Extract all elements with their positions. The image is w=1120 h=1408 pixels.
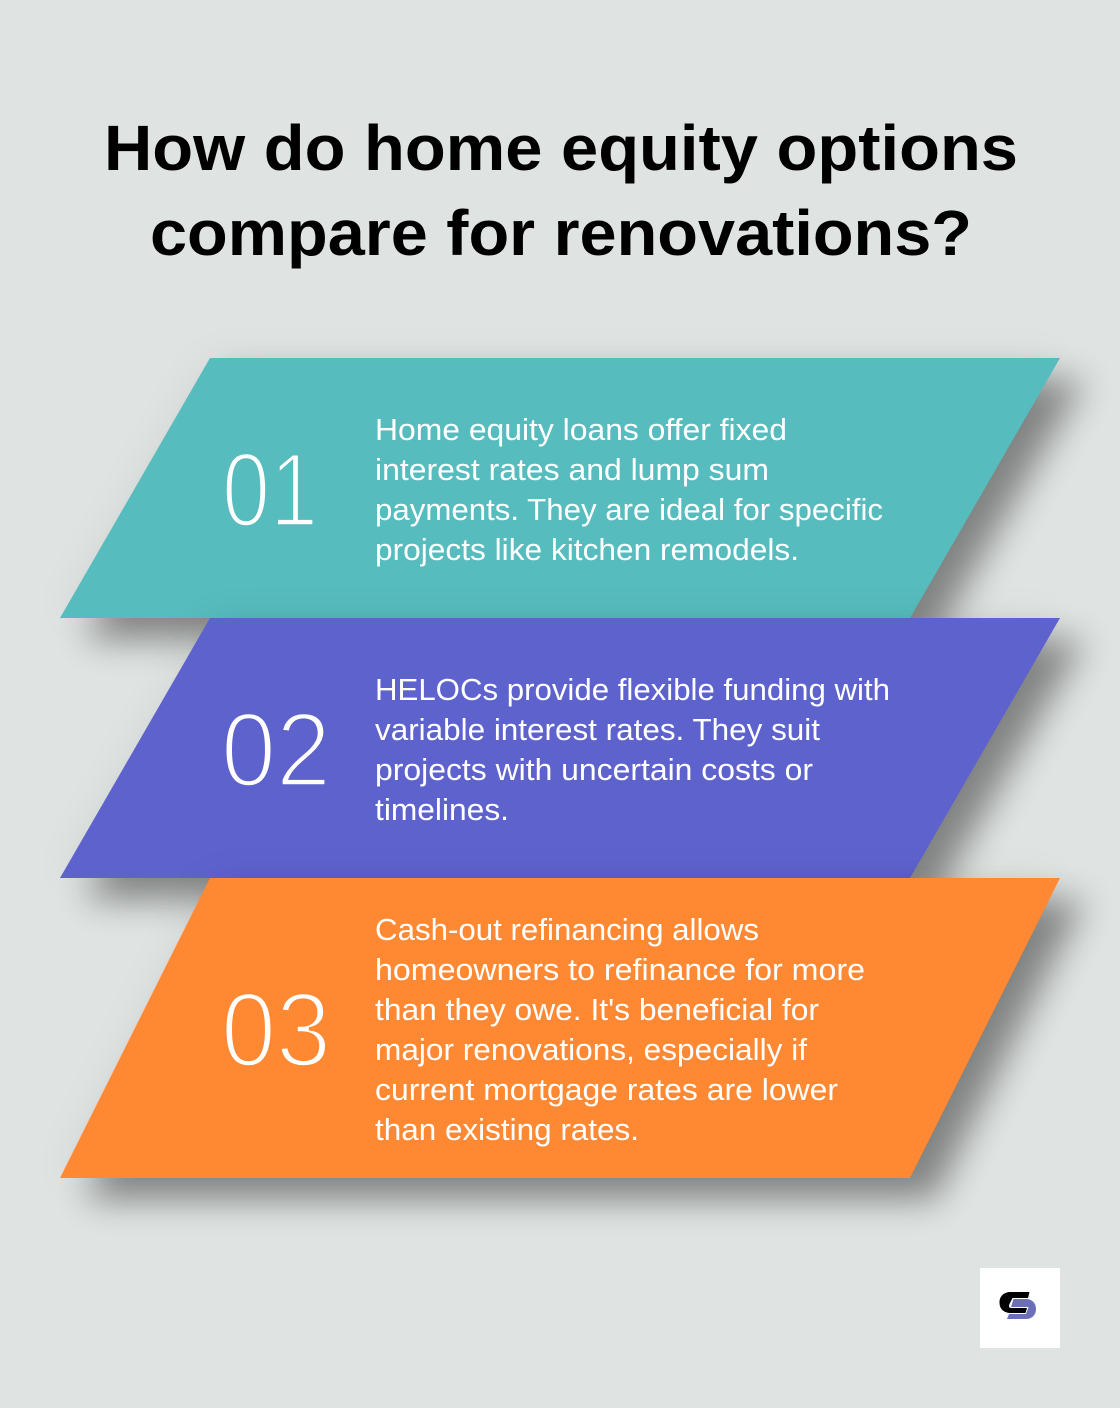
panel: option 03 cash-out refinancing [60,878,1085,1200]
number 03: 03 [221,972,331,1089]
text: option 01 description: projects like kitchen remodels. [375,532,799,567]
text: option 03 description: than they owe. It's beneficial for [375,992,819,1027]
text: option 02 description: projects with uncertain costs or [375,752,813,787]
text: option 01 description [375,412,883,567]
text: option 03 description: than existing rates. [375,1112,639,1147]
title: compare for renovations? [150,197,972,269]
text: option 03 description: homeowners to refinance for more [375,952,865,987]
logo [980,1268,1060,1348]
text: option 02 description: HELOCs provide flexible funding with [375,672,890,707]
text: option 01 description: interest rates and lump sum [375,452,769,487]
panel: option 01 home equity loans [60,358,1085,640]
text: option 02 description: timelines. [375,792,509,827]
title [104,112,1018,269]
text: option 03 description: major renovations, especially if [375,1032,807,1067]
text: option 02 description [375,672,890,827]
text: option 03 description [375,912,865,1147]
text: option 01 description: payments. They are ideal for specific [375,492,883,527]
panel: option 02 HELOCs [60,618,1085,900]
text: option 03 description: current mortgage rates are lower [375,1072,838,1107]
number 02: 02 [221,692,331,809]
text: option 02 description: variable interest rates. They suit [375,712,820,747]
text: option 01 description: Home equity loans offer fixed [375,412,787,447]
text: option 03 description: Cash-out refinancing allows [375,912,759,947]
number 01: 01 [222,432,318,549]
title: How do home equity options [104,112,1018,184]
